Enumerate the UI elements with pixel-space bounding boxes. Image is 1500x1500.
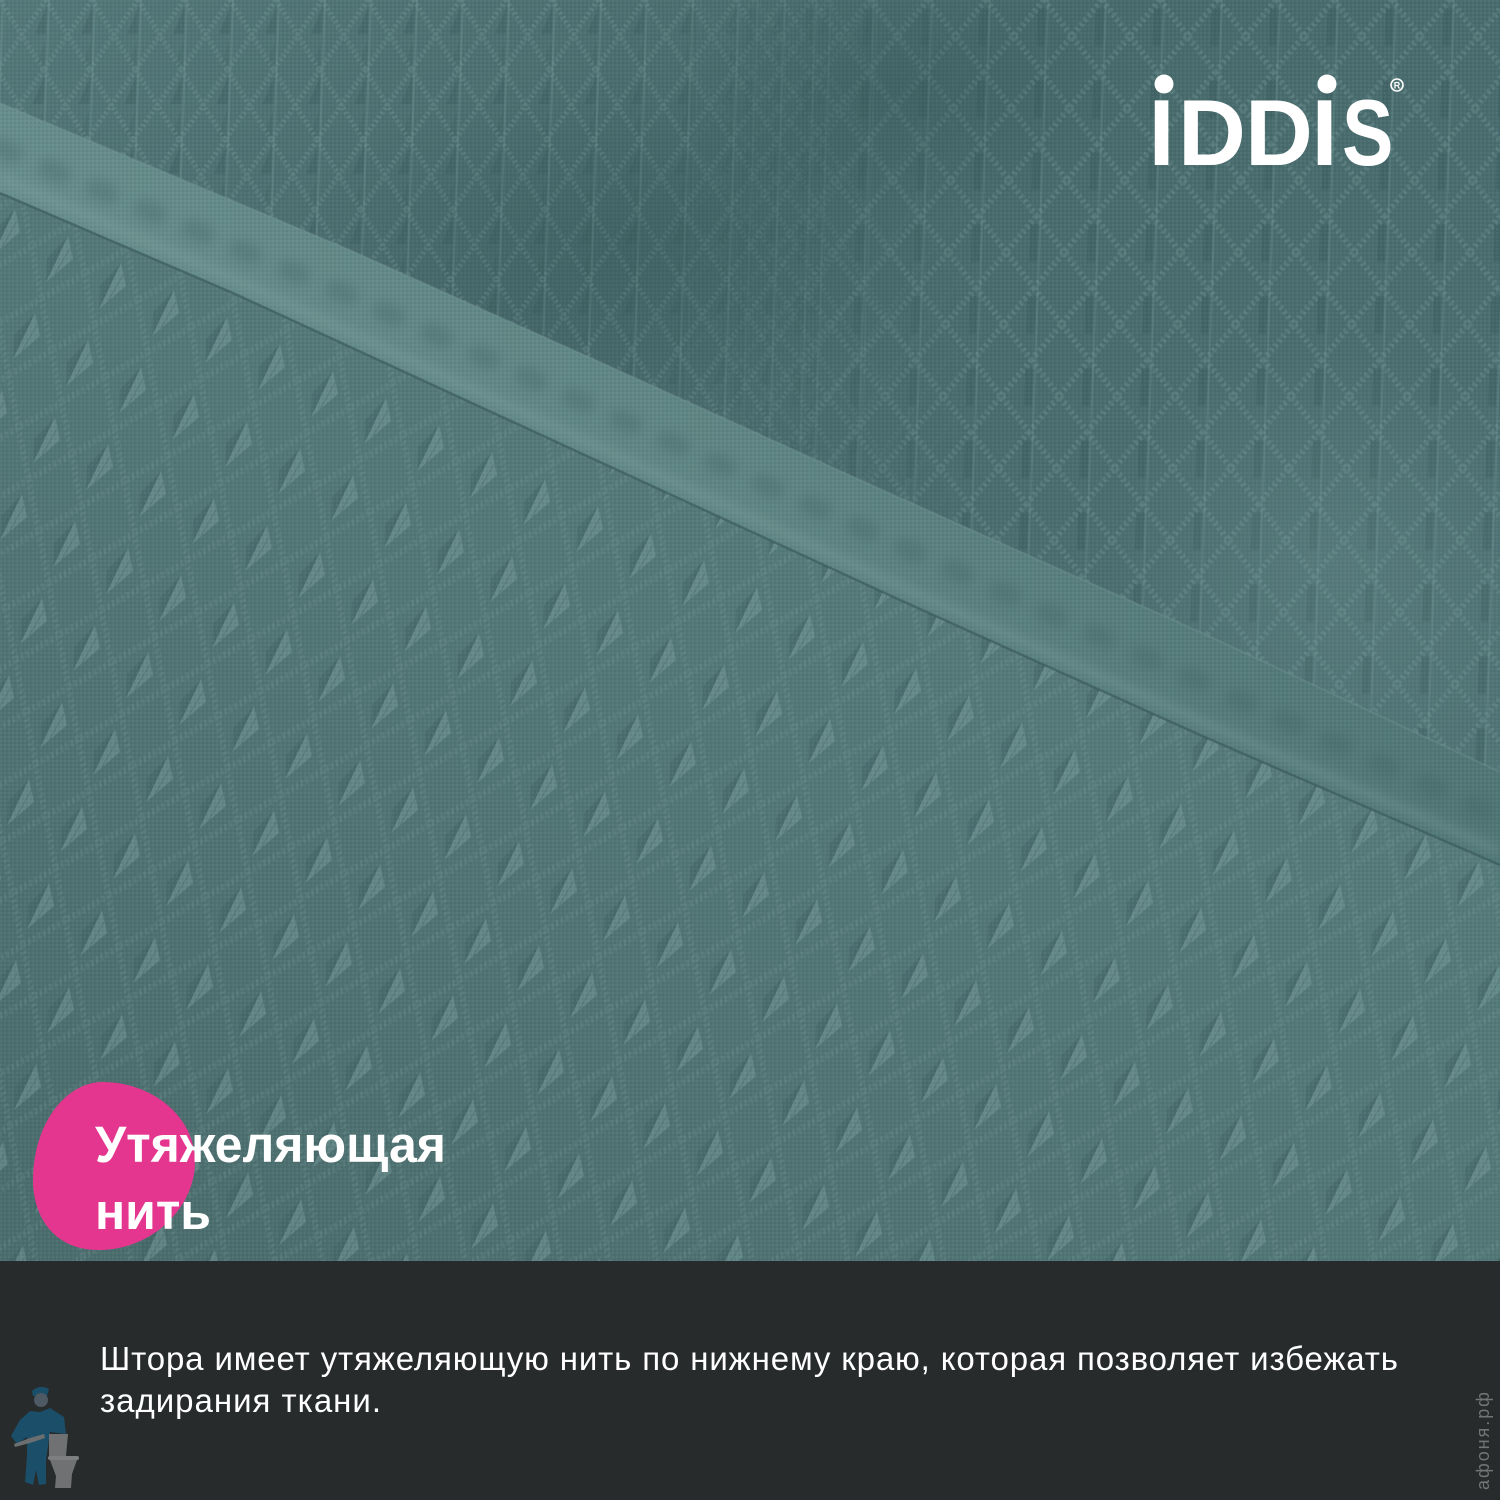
watermark: site name: афоня.рф (1473, 1392, 1493, 1490)
logo: IDDIS: R (1394, 80, 1401, 90)
logo: IDDIS: IDDI (1148, 80, 1338, 185)
heading: Утяжеляющая (95, 1116, 446, 1173)
logo: IDDIS: S (1342, 81, 1393, 186)
heading (95, 1116, 446, 1240)
photo: lower curtain fabric (0, 193, 1500, 1261)
body text: Штора имеет утяжеляющую нить по нижнему краю, которая позволяет избежать (100, 1340, 1398, 1377)
icon: plumber with toilet (11, 1387, 79, 1488)
photo: weighted hem band (0, 103, 1500, 865)
pink accent blob (33, 1082, 195, 1250)
dark footer bar (0, 1261, 1500, 1500)
body text: задирания ткани. (100, 1382, 381, 1419)
heading: нить (95, 1183, 211, 1240)
photo: upper curtain fabric (0, 0, 1500, 772)
body text (100, 1340, 1398, 1419)
